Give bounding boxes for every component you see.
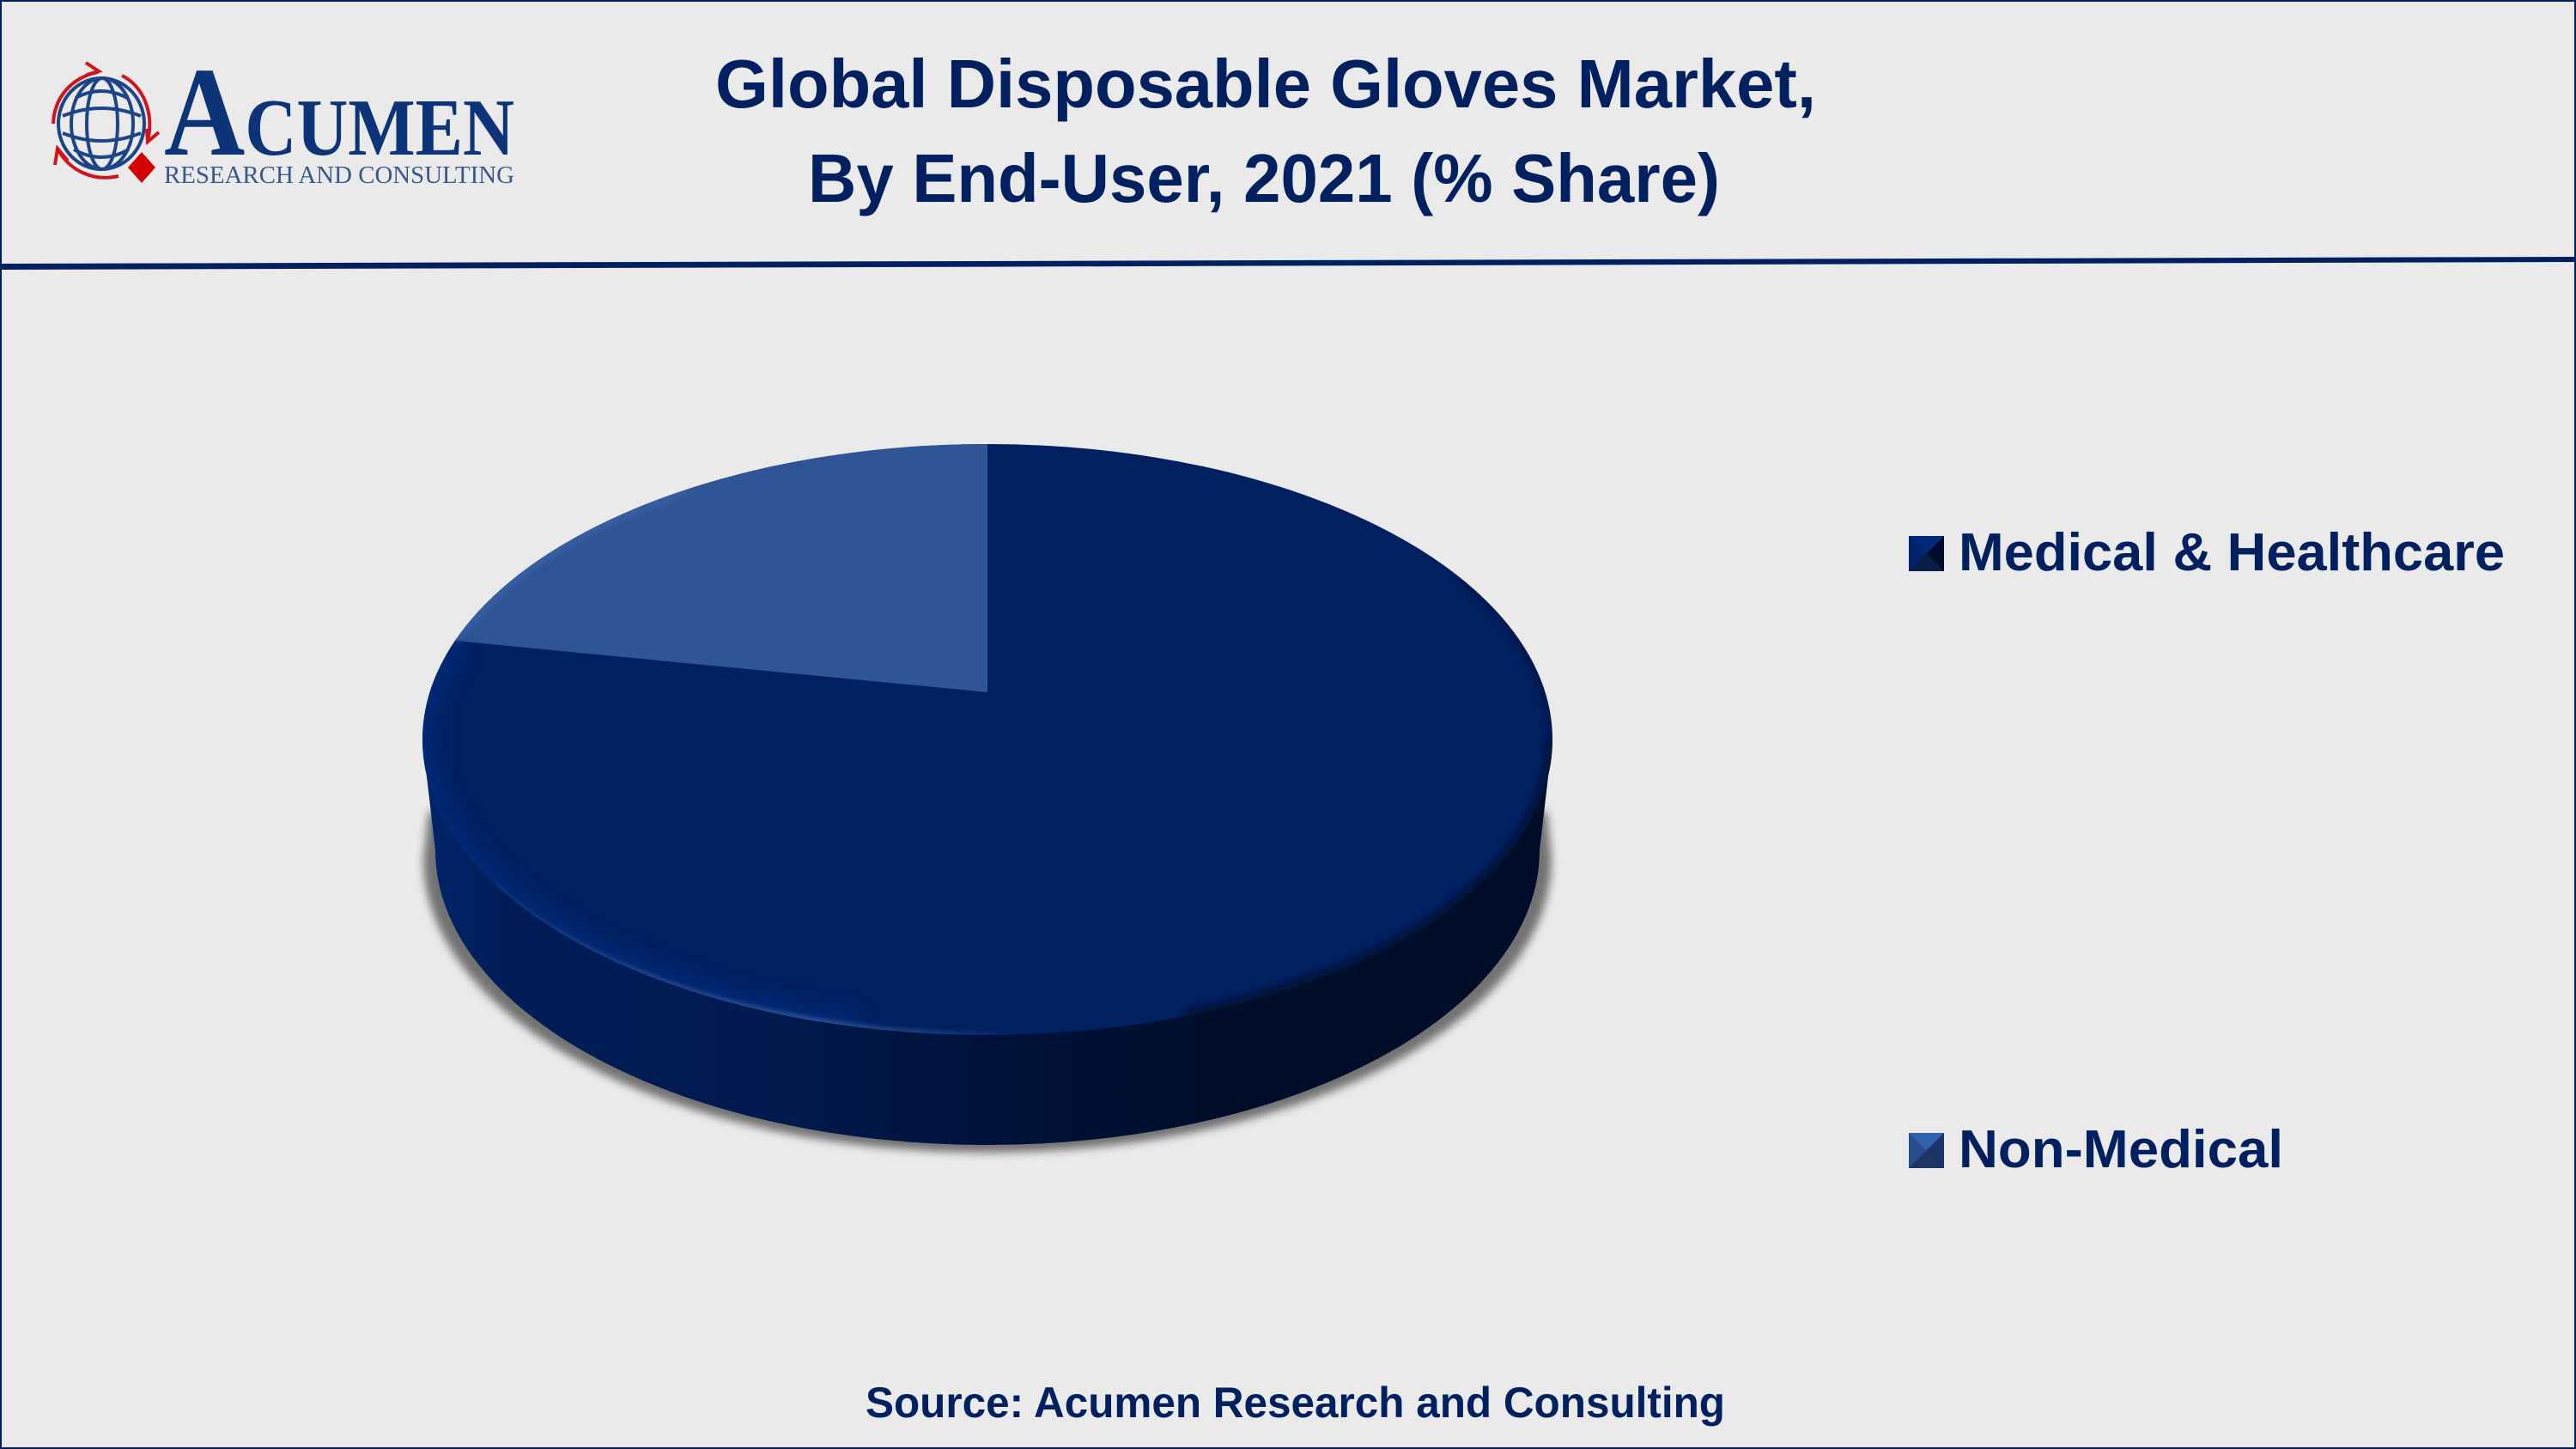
icon: red circular arrows: [53, 63, 159, 178]
title: Global Disposable Gloves Market,: [715, 46, 1816, 122]
logo wordmark: ACUMEN: [164, 42, 514, 183]
pie shadow: [423, 812, 1552, 1153]
icon: red diamond: [128, 152, 155, 183]
legend item: Medical & Healthcare: Medical & Healthcare: [1959, 523, 2505, 582]
legend: [1909, 523, 2505, 1179]
title: By End-User, 2021 (% Share): [808, 140, 1720, 216]
logo tagline: RESEARCH AND CONSULTING: [164, 161, 514, 189]
slice: Non-Medical: [455, 444, 987, 692]
icon: globe: [58, 78, 144, 169]
slice: Medical & Healthcare: [422, 444, 1552, 1035]
pie chart: end-user share: [422, 444, 1552, 1153]
title: [715, 46, 1816, 216]
legend marker: medium blue: [1909, 1133, 1944, 1168]
pie side wall: [422, 740, 1552, 1145]
pie top bevel: [422, 490, 1552, 1035]
source note: Source: Acumen Research and Consulting: [866, 1379, 1725, 1427]
logo: Acumen Research and Consulting: [53, 42, 514, 189]
legend item: Non-Medical: Non-Medical: [1959, 1120, 2283, 1179]
legend marker: navy: [1909, 536, 1944, 571]
